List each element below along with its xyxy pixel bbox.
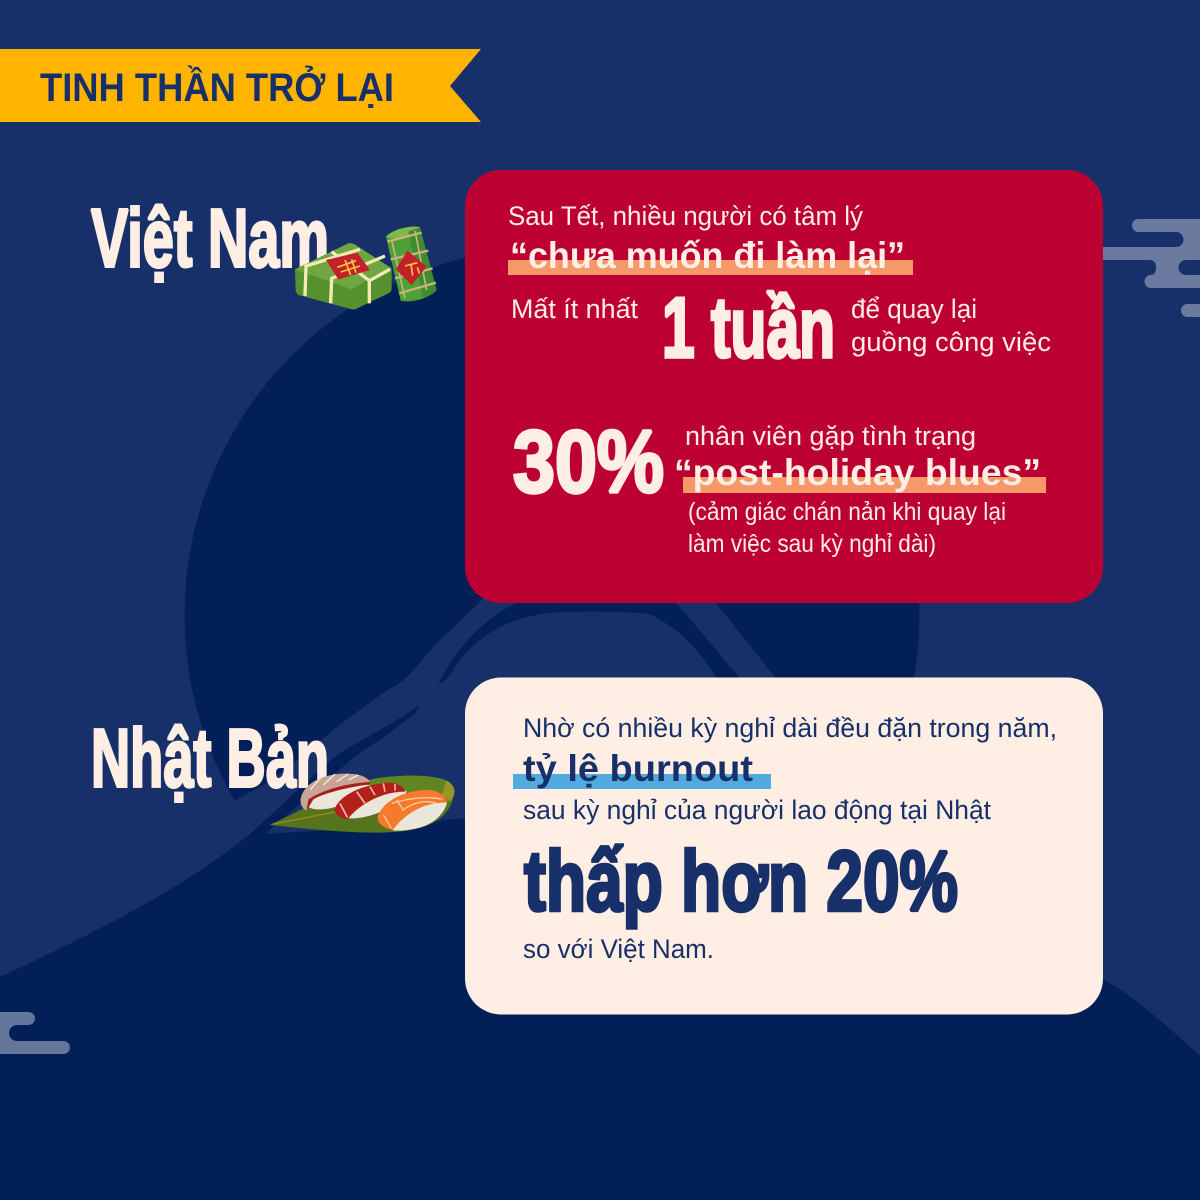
title ribbon: [0, 49, 481, 122]
highlighted quote: chưa muốn đi làm lại: “chưa muốn đi làm lại”: [510, 235, 905, 276]
panel: Việt Nam: [465, 170, 1103, 603]
icon: sushi on leaf: [269, 774, 454, 833]
text: intro line: Nhờ có nhiều kỳ nghỉ dài đều đặn trong năm,: [523, 713, 1057, 743]
text: để quay lại guồng công việc: [851, 294, 1051, 357]
panel: Nhật Bản: [465, 678, 1103, 1014]
icon: banh chung and banh tet: [295, 227, 437, 310]
text: explanation of post-holiday blues: (cảm giác chán nản khi quay lại: [688, 498, 1006, 526]
text: để quay lại guồng công việc: guồng công việc: [851, 327, 1051, 357]
text: để quay lại guồng công việc: để quay lại: [851, 294, 977, 324]
text: nhân viên gặp tình trạng: nhân viên gặp tình trạng: [685, 421, 976, 451]
heading: Việt Nam: Việt Nam: [91, 192, 329, 284]
highlighted quote: post-holiday blues: “post-holiday blues”: [674, 452, 1041, 493]
text: explanation of post-holiday blues: làm việc sau kỳ nghỉ dài): [688, 530, 936, 558]
text: explanation of post-holiday blues: [688, 498, 1006, 558]
text: so với Việt Nam: so với Việt Nam.: [523, 934, 714, 964]
text: intro line: Sau Tết, nhiều người có tâm lý: [508, 201, 863, 231]
big stat: 1 tuần: 1 tuần: [662, 281, 835, 376]
text: Mất ít nhất: Mất ít nhất: [511, 294, 638, 324]
title ribbon: TINH THẦN TRỞ LẠI: [40, 64, 394, 110]
big stat: 30%: 30%: [513, 412, 664, 511]
cloud: bottom left: [0, 1012, 70, 1054]
text: sau kỳ nghỉ: sau kỳ nghỉ của người lao động tại Nhật: [523, 795, 991, 825]
cloud: top right: [1103, 219, 1200, 317]
big stat: thấp hơn 20%: thấp hơn 20%: [524, 834, 958, 930]
heading: Nhật Bản: Nhật Bản: [91, 712, 329, 804]
highlighted phrase: tỷ lệ burnout: tỷ lệ burnout: [523, 748, 753, 789]
